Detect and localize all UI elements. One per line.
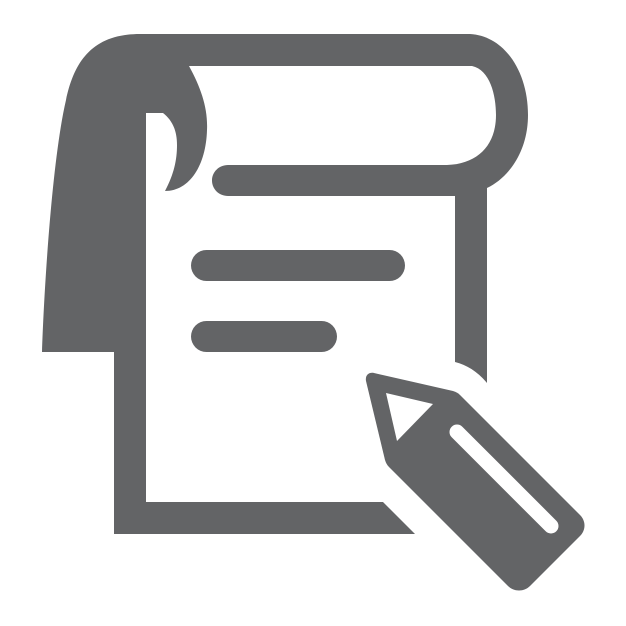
pencil slot highlight — [457, 432, 551, 526]
text line 2 — [191, 250, 405, 281]
text line 3 — [191, 321, 337, 352]
icon: pencil — [366, 373, 584, 590]
scroll page outline with curl and top line — [42, 34, 528, 534]
pencil body — [366, 373, 584, 590]
pencil tip highlight — [386, 393, 433, 441]
